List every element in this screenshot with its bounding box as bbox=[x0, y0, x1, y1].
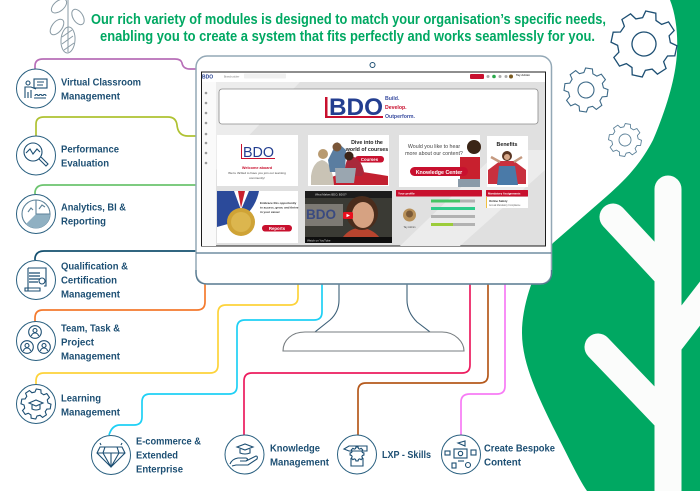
card: courses bbox=[308, 135, 389, 186]
item: Team, Task & Project Management: Team, Task & bbox=[61, 322, 120, 334]
icon: certificate scroll bbox=[25, 268, 46, 291]
item: Learning Management bbox=[16, 384, 120, 424]
item: Analytics, BI & Reporting bbox=[16, 194, 126, 234]
person with red book bbox=[458, 140, 481, 187]
item: Create Bespoke Content: Content bbox=[484, 456, 521, 468]
card: welcome: community! bbox=[249, 176, 265, 180]
card: knowledge center: Would you like to hear bbox=[408, 144, 460, 150]
item: Team, Task & Project Management: Project bbox=[61, 336, 94, 348]
your profile panel: Tay Admin bbox=[404, 225, 416, 229]
green leaf background bbox=[522, 0, 700, 491]
card: courses: Courses bbox=[361, 157, 379, 162]
item: Performance Evaluation: Performance bbox=[61, 144, 119, 156]
icon: three people bbox=[21, 326, 50, 353]
item: Analytics, BI & Reporting: Reporting bbox=[61, 216, 106, 228]
card: knowledge center: more about our content? bbox=[405, 151, 463, 157]
course students photo bbox=[311, 142, 388, 185]
banner: BDO bbox=[329, 94, 383, 121]
sidebar bbox=[202, 82, 216, 246]
top bar bbox=[202, 73, 530, 80]
item: E-commerce & Extended Enterprise bbox=[92, 436, 201, 476]
banner: Outperform. bbox=[385, 114, 416, 120]
icon: gear with graduation cap bbox=[19, 387, 53, 421]
card: welcome: Welcome aboard bbox=[242, 166, 273, 170]
icon: hand with pencil and gear bbox=[344, 446, 367, 466]
icon: pie chart bbox=[22, 200, 50, 228]
card: reports: Reports bbox=[269, 226, 286, 231]
title bbox=[91, 12, 606, 45]
item: Performance Evaluation: Evaluation bbox=[61, 158, 109, 170]
mandatory assignments panel: Mandatory Assignments bbox=[488, 192, 521, 196]
monitor stand bbox=[283, 284, 464, 351]
video: What Makes BDO, BDO? bbox=[315, 192, 347, 196]
card: courses: Dive into the bbox=[351, 140, 383, 146]
item: Virtual Classroom Management: Virtual Classroom bbox=[61, 76, 141, 88]
gear: medium bbox=[561, 65, 611, 115]
item: Knowledge Management: Management bbox=[270, 456, 329, 468]
item: Learning Management: Management bbox=[61, 406, 120, 418]
top bar: BDO bbox=[202, 74, 213, 80]
card: reports bbox=[217, 191, 299, 243]
icon: diamond bbox=[97, 443, 125, 467]
item: Team, Task & Project Management: Management bbox=[61, 350, 120, 362]
item: LXP - Skills bbox=[338, 435, 431, 474]
video bbox=[305, 191, 392, 243]
mandatory assignments panel: Annual Mandatory Compliance bbox=[489, 204, 521, 207]
card: knowledge center: Knowledge Center bbox=[416, 170, 462, 176]
banner: Build. bbox=[385, 96, 400, 102]
icon: content creation screen bbox=[445, 441, 476, 468]
card: reports: Embrace this opportunity bbox=[260, 201, 297, 205]
card: knowledge center bbox=[399, 135, 481, 187]
item: Team, Task & Project Management bbox=[16, 322, 120, 362]
item: Analytics, BI & Reporting: Analytics, BI & bbox=[61, 202, 126, 214]
item: Knowledge Management bbox=[225, 435, 329, 474]
icon: hand holding cap bbox=[230, 444, 257, 466]
decorative leaves bbox=[48, 0, 87, 53]
card: courses: world of courses bbox=[345, 147, 388, 153]
item: Qualification & Certification Management: Management bbox=[61, 288, 120, 300]
video: BDO bbox=[306, 206, 336, 222]
title: enabling you to create a system that fits perfectly and works seamlessly for you. bbox=[100, 29, 595, 45]
card: reports: in your career bbox=[260, 210, 281, 214]
video: Watch on YouTube bbox=[307, 238, 331, 242]
top bar: Branch picker bbox=[224, 76, 239, 78]
banner: Develop. bbox=[385, 105, 407, 111]
card: welcome bbox=[217, 135, 298, 186]
benefits photo bbox=[488, 151, 526, 185]
mandatory assignments panel bbox=[486, 190, 528, 208]
item: LXP - Skills: LXP - Skills bbox=[382, 449, 431, 461]
card: benefits: Benefits bbox=[497, 142, 517, 148]
icon: magnifier with trend line bbox=[24, 143, 48, 166]
card: reports: to access, grow, and thrive bbox=[260, 206, 299, 210]
your profile panel bbox=[396, 190, 482, 229]
banner bbox=[219, 89, 538, 124]
item: Qualification & Certification Management: Certification bbox=[61, 274, 117, 286]
item: E-commerce & Extended Enterprise: Extended bbox=[136, 450, 178, 462]
item: Learning Management: Learning bbox=[61, 392, 101, 404]
title: Our rich variety of modules is designed to match your organisation’s specific needs, bbox=[91, 12, 606, 28]
mandatory assignments panel: Online Safety bbox=[489, 199, 508, 203]
item: Performance Evaluation bbox=[16, 136, 119, 175]
item: Virtual Classroom Management: Management bbox=[61, 90, 120, 102]
item: Virtual Classroom Management bbox=[16, 69, 141, 108]
connector lines bbox=[35, 59, 505, 435]
card: benefits bbox=[487, 136, 528, 187]
screen bbox=[202, 72, 546, 246]
gear: small bbox=[606, 121, 644, 159]
item: Create Bespoke Content: Create Bespoke bbox=[484, 442, 555, 454]
item: Qualification & Certification Management bbox=[16, 260, 128, 300]
monitor bbox=[196, 56, 552, 284]
item: Create Bespoke Content bbox=[442, 435, 555, 474]
white tree trunk and branches bbox=[598, 189, 700, 491]
card: welcome: BDO bbox=[243, 145, 274, 161]
top bar: Tay Admin bbox=[516, 73, 530, 77]
item: E-commerce & Extended Enterprise: E-commerce & bbox=[136, 436, 201, 448]
item: Qualification & Certification Management: Qualification & bbox=[61, 260, 128, 272]
icon: presenter with board bbox=[25, 79, 47, 98]
item: E-commerce & Extended Enterprise: Enterprise bbox=[136, 464, 183, 476]
your profile panel: Your profile bbox=[398, 192, 415, 196]
card: welcome: We're thrilled to have you join our learning bbox=[228, 171, 286, 175]
item: Knowledge Management: Knowledge bbox=[270, 442, 320, 454]
gear: large bbox=[605, 5, 683, 83]
